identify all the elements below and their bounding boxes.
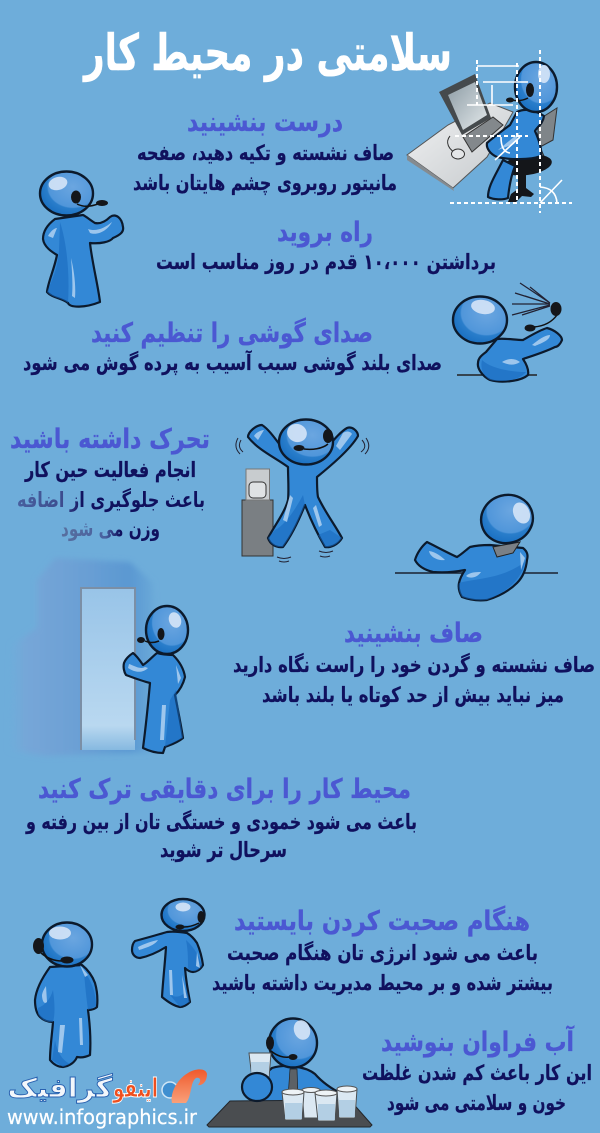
icon: water cooler: [242, 469, 273, 556]
heading: walk: راه بروید: [277, 217, 373, 248]
panel: sit straight: [233, 618, 595, 707]
body line 1: باعث می شود خمودی و خستگی تان از بین رفته و: [25, 809, 417, 834]
heading: leave workplace for minutes: محیط کار را برای دقایقی ترک کنید: [38, 774, 411, 805]
body: steps per day: برداشتن ۱۰،۰۰۰ قدم در روز مناسب است: [156, 250, 496, 274]
body line 1: انجام فعالیت حین کار: [24, 458, 196, 482]
heading: sit correctly: درست بنشینید: [187, 107, 343, 138]
icon: figure standing, back view: [33, 922, 97, 1067]
panel: drink water: [362, 1025, 592, 1115]
heading: sit straight: صاف بنشینید: [344, 618, 483, 649]
icon: figure at table with water glasses: [207, 1018, 372, 1127]
glass 2: [337, 1086, 357, 1118]
panel: sit correctly: [133, 107, 397, 195]
heading: keep moving: تحرک داشته باشید: [10, 424, 210, 455]
logo flame: [172, 1069, 207, 1103]
panel: keep moving: [10, 424, 210, 541]
icon: jumping figure: [236, 420, 369, 562]
glass in hand: [249, 1053, 271, 1078]
glass 4: [315, 1090, 337, 1121]
body line 1: صاف نشسته و تکیه دهید، صفحه: [137, 141, 394, 165]
logo: infographics: [7, 1069, 207, 1129]
panel: stand while talking: [212, 905, 553, 995]
panel: take a break: [25, 774, 417, 862]
icon: figure at the door: [124, 606, 188, 753]
icon: walking figure: [40, 172, 123, 307]
body line 2: مانیتور روبروی چشم هایتان باشد: [133, 171, 397, 195]
icon: figure with loud headset: [453, 283, 562, 382]
body line 2: باعث جلوگیری از اضافه: [17, 487, 205, 512]
panel: adjust headset volume: [23, 317, 442, 375]
logo orb: [162, 1082, 178, 1098]
icon: figure sitting straight at desk: [395, 489, 558, 600]
heading: stand while talking: هنگام صحبت کردن بایستید: [234, 905, 530, 937]
icon: figure seated at computer: [407, 50, 572, 213]
heading: adjust volume: صدای گوشی را تنظیم کنید: [91, 317, 373, 349]
icon: door with light: [10, 558, 160, 756]
body: loud volume damages eardrum: صدای بلند گوشی سبب آسیب به پرده گوش می شود: [23, 350, 442, 375]
title: سلامتی در محیط کار: [82, 24, 452, 82]
glass 1: [302, 1088, 320, 1118]
website url: www.infographics.ir: [7, 1105, 198, 1129]
body line 2: سرحال تر شوید: [160, 838, 287, 862]
logo wordmark white: گرافیک: [8, 1073, 113, 1104]
logo wordmark orange: اینفو: [112, 1074, 158, 1104]
body line 3: وزن می شود: [61, 517, 160, 541]
hand holding glass: [242, 1073, 272, 1101]
icon: figure talking with outstretched arm: [132, 899, 204, 1007]
panel: walk: [156, 217, 496, 274]
glass 3: [282, 1089, 304, 1120]
